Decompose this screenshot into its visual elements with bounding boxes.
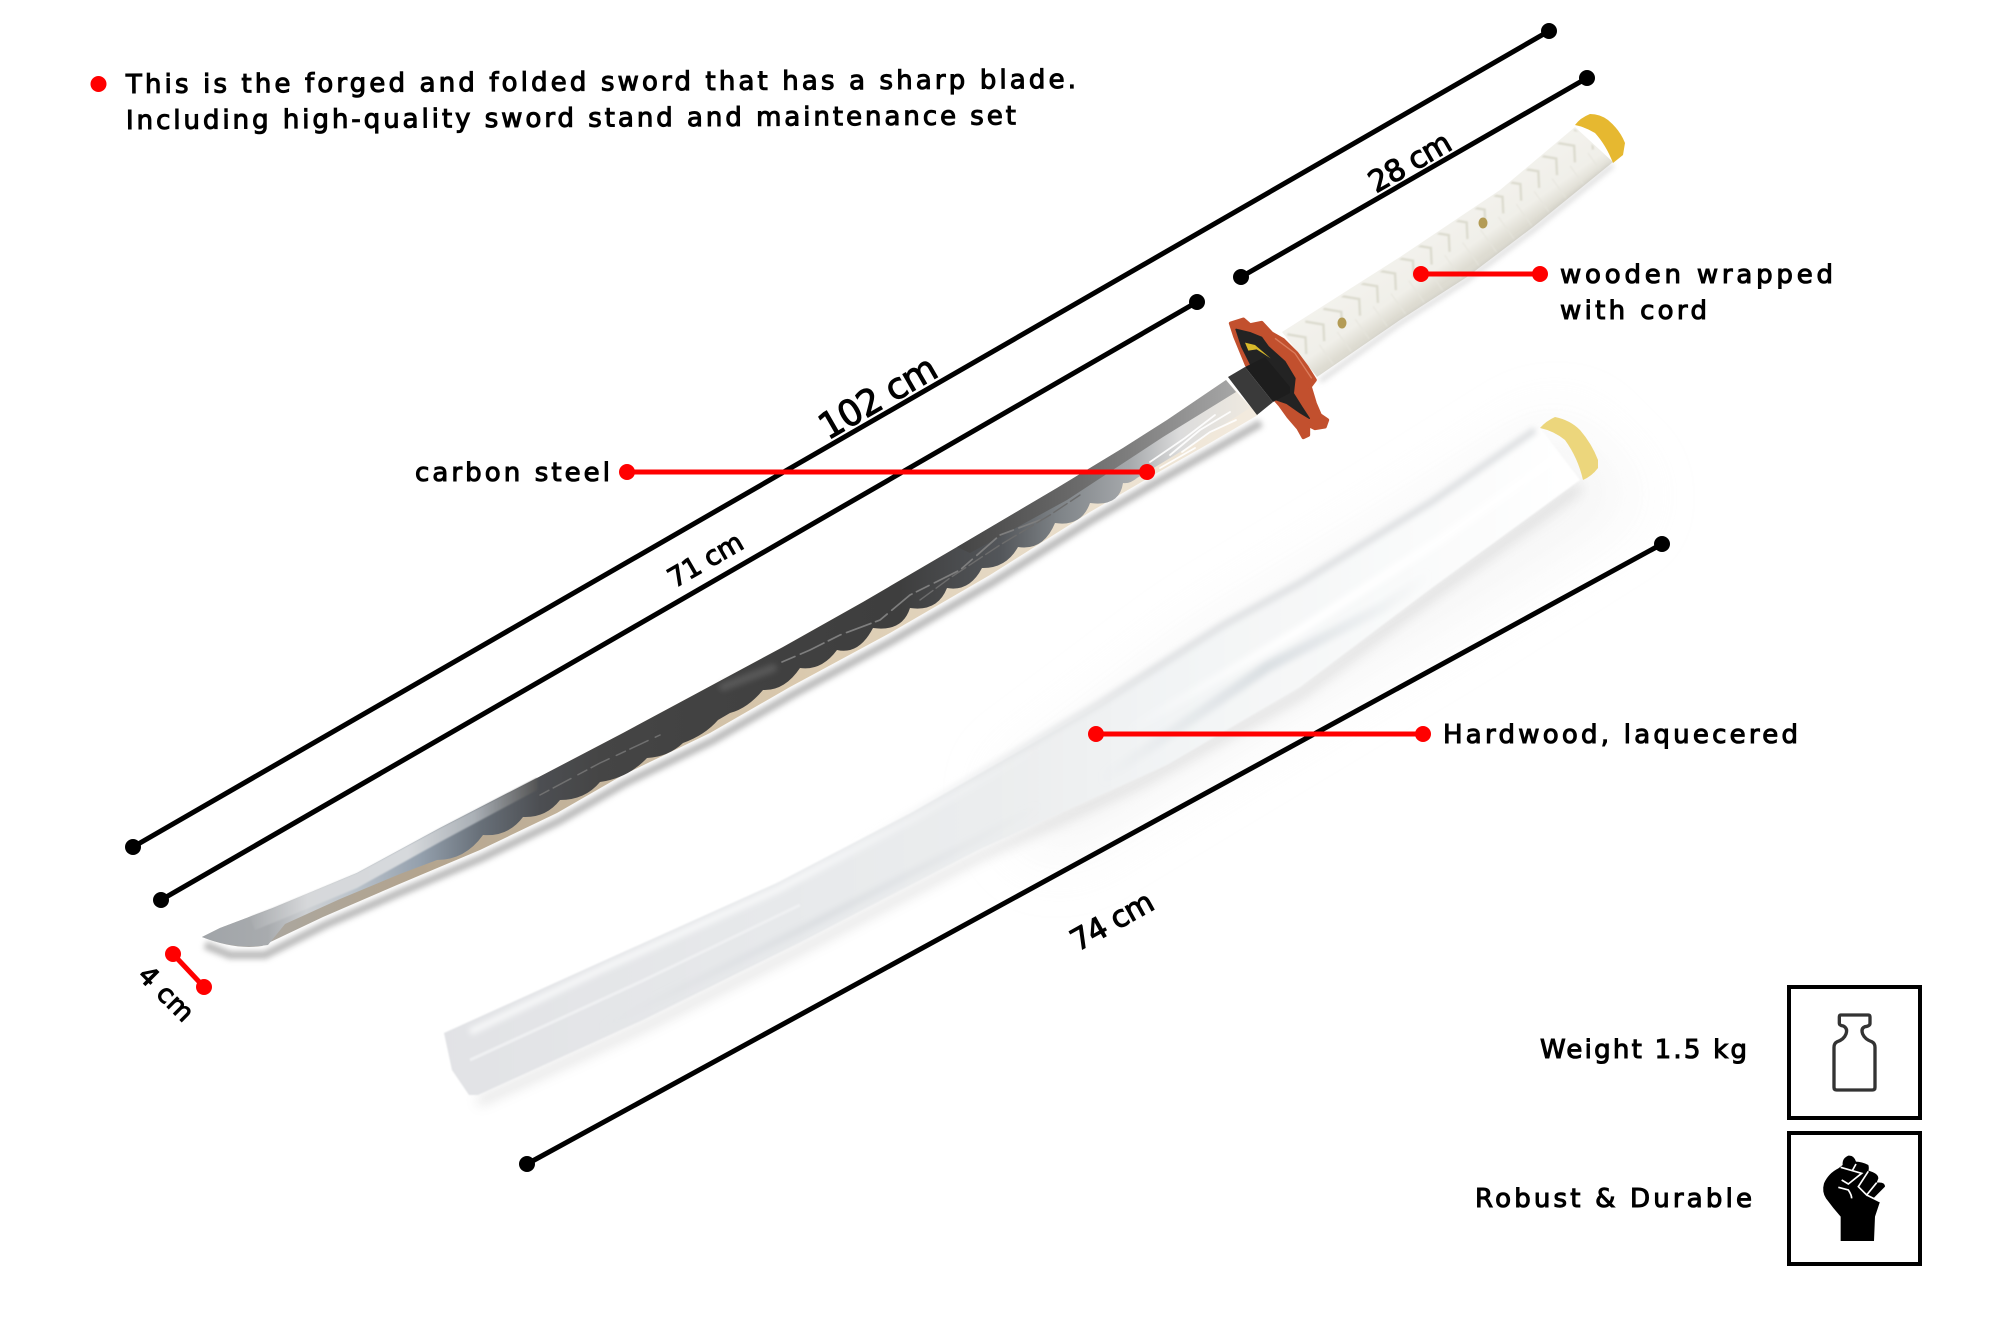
callout: wooden wrapped with cord: wooden wrapped xyxy=(1560,260,1833,290)
callout: carbon steel xyxy=(415,458,1155,488)
bullet and intro text: This is the forged and folded sword that has a sharp blade. xyxy=(125,65,1076,100)
dimension: 102 cm: 102 cm xyxy=(812,348,945,448)
blade upper light strip xyxy=(250,778,537,930)
dimension: 4 cm: 4 cm xyxy=(132,960,200,1028)
callout: carbon steel: carbon steel xyxy=(415,458,610,488)
callout: wooden wrapped with cord: with cord xyxy=(1560,296,1707,326)
dimension: 74 cm xyxy=(519,536,1670,1172)
callout: hardwood lacquered: Hardwood, laquecered xyxy=(1443,720,1798,750)
blade xyxy=(202,380,1258,947)
scabbard xyxy=(444,417,1640,1102)
dimension: 28 cm xyxy=(1233,70,1595,285)
scabbard cap xyxy=(1540,417,1598,480)
upper edge shading xyxy=(850,430,1535,848)
label: robust and durable: Robust & Durable xyxy=(1475,1184,1752,1214)
dimension: 74 cm: 74 cm xyxy=(1065,885,1160,959)
blade collar xyxy=(1228,357,1290,415)
icon box: fist xyxy=(1789,1133,1920,1264)
callout: hardwood lacquered xyxy=(1088,720,1798,750)
dimension: 71 cm: 71 cm xyxy=(662,527,749,595)
callout: wooden wrapped with cord xyxy=(1413,260,1833,326)
bullet and intro text: Including high-quality sword stand and maintenance set xyxy=(126,101,1016,136)
sword xyxy=(202,114,1625,955)
ridge band xyxy=(957,380,1236,553)
pommel xyxy=(1575,114,1625,163)
scabbard reflections xyxy=(1100,575,1430,780)
label: weight: Weight 1.5 kg xyxy=(1540,1035,1747,1065)
handle xyxy=(1282,127,1613,381)
grain xyxy=(540,412,1236,795)
guard xyxy=(1231,319,1327,437)
bullet and intro text xyxy=(90,65,1076,136)
icon box: weight xyxy=(1789,987,1920,1118)
dimension: 28 cm: 28 cm xyxy=(1363,125,1458,200)
dimension: 102 cm xyxy=(125,23,1557,855)
dimension: 71 cm xyxy=(153,294,1205,908)
dimension: 4 cm xyxy=(132,946,212,1028)
